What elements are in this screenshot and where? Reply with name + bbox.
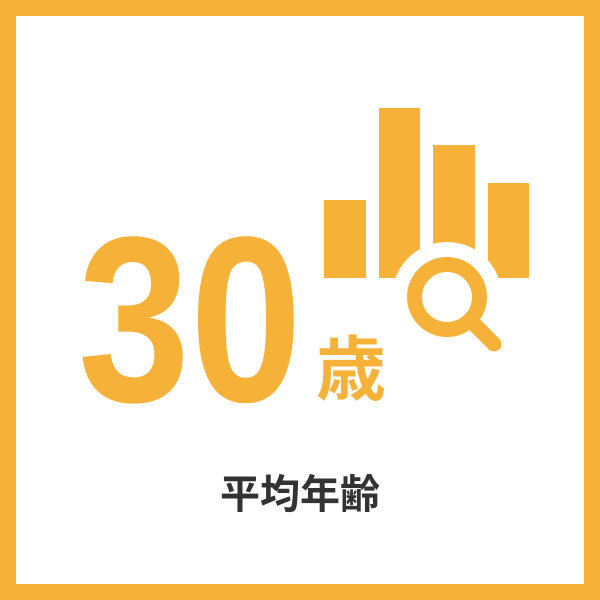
icon: magnifier [414,264,494,344]
bar chart icon [324,108,529,352]
label 平均年齢: 平均年齢 [220,473,380,517]
big number 30: 30 [78,188,302,452]
unit 歳: 歳 [316,331,386,409]
